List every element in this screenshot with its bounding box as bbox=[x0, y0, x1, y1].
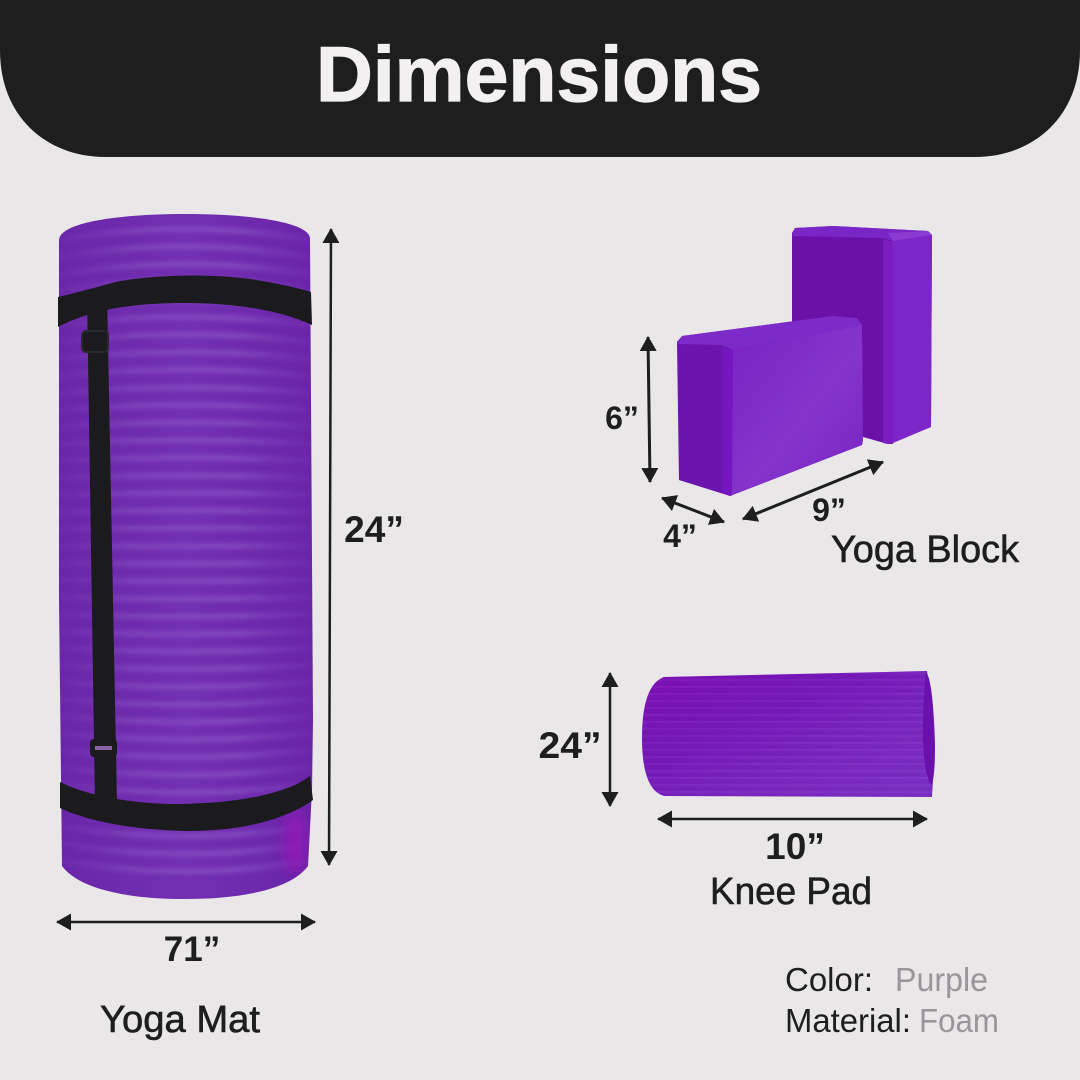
yoga blocks product bbox=[677, 226, 932, 496]
knee pad product bbox=[642, 671, 935, 797]
arrow: block length bbox=[743, 462, 883, 519]
spec: color: Color: bbox=[785, 961, 873, 998]
arrow: knee pad height bbox=[609, 673, 611, 806]
bottom strap bbox=[60, 776, 313, 831]
top buckle bbox=[82, 331, 108, 352]
title banner bbox=[0, 0, 1080, 157]
spec: color: Purple bbox=[895, 961, 988, 998]
spec: color bbox=[785, 961, 988, 998]
arrow: knee pad width bbox=[658, 818, 927, 820]
arrow: block depth bbox=[662, 498, 724, 522]
label: block length: 9” bbox=[812, 492, 846, 528]
spec: material bbox=[785, 1002, 999, 1039]
title: Dimensions bbox=[316, 30, 762, 118]
label: yoga mat: Yoga Mat bbox=[100, 999, 260, 1041]
vertical strap bbox=[87, 292, 117, 805]
front block bbox=[677, 316, 863, 496]
label: knee pad width: 10” bbox=[765, 826, 825, 867]
label: mat height: 24” bbox=[344, 509, 404, 550]
label: knee pad height: 24” bbox=[538, 725, 602, 766]
arrow: mat width bbox=[57, 921, 315, 923]
back block bbox=[792, 226, 932, 444]
label: yoga block: Yoga Block bbox=[831, 529, 1020, 571]
top strap bbox=[58, 275, 312, 327]
label: mat width: 71” bbox=[164, 930, 220, 969]
label: knee pad: Knee Pad bbox=[710, 871, 872, 913]
arrow: block height bbox=[648, 337, 650, 482]
arrow: mat height bbox=[329, 229, 331, 865]
yoga mat product bbox=[58, 214, 313, 899]
label: block height: 6” bbox=[605, 400, 639, 436]
spec: material: Material: bbox=[785, 1002, 911, 1039]
label: block depth: 4” bbox=[663, 518, 697, 554]
bottom buckle bbox=[90, 739, 117, 757]
spec: material: Foam bbox=[919, 1002, 999, 1039]
